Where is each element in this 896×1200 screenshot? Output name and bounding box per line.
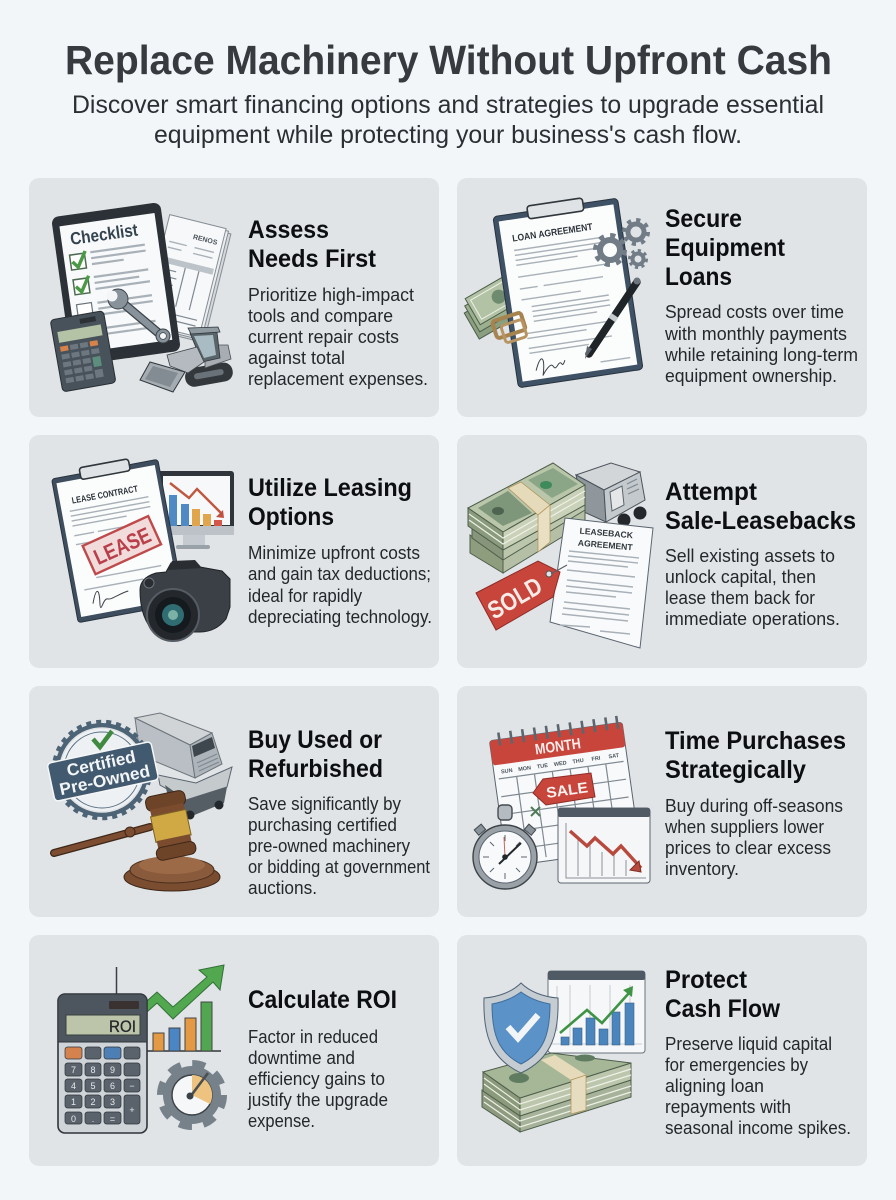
body text: Minimize upfront costs — [248, 543, 420, 563]
panel: buy used or refurbished — [29, 686, 439, 917]
heading: Options — [248, 503, 334, 531]
icon: calendar, stopwatch, falling chart window: MONTH — [534, 735, 582, 758]
heading: Strategically — [665, 756, 806, 784]
icon: lease contract, monitor chart, camera: LEASE — [90, 522, 155, 570]
icon: calendar, stopwatch, falling chart window: MON — [518, 765, 531, 773]
heading: Loans — [665, 263, 732, 291]
body text: efficiency gains to — [248, 1069, 385, 1089]
heading: Attempt — [665, 478, 758, 506]
body text: seasonal income spikes. — [665, 1118, 851, 1138]
body text — [664, 796, 843, 879]
body text: current repair costs — [248, 327, 399, 347]
icon: ROI calculator, growth chart, gauge gear: 5 — [90, 1081, 96, 1091]
icon: cash stacks, machine, leaseback agreement, sold tag — [468, 463, 653, 648]
body text: unlock capital, then — [665, 567, 816, 587]
heading: Equipment — [665, 234, 786, 262]
body text: Prioritize high-impact — [248, 285, 414, 305]
heading: Buy Used or — [248, 726, 382, 754]
body text: prices to clear excess — [665, 838, 831, 858]
body text — [665, 1034, 851, 1138]
icon: checklist tablet, invoice, calculator, bulldozer: RENOS — [192, 234, 218, 247]
heading: Cash Flow — [665, 995, 781, 1023]
body text: and gain tax deductions; — [248, 564, 431, 584]
heading — [665, 966, 781, 1023]
icon: ROI calculator, growth chart, gauge gear: 9 — [110, 1065, 115, 1075]
heading: Time Purchases — [665, 727, 846, 755]
heading: Needs First — [248, 245, 377, 273]
body text — [248, 285, 428, 389]
body text: Preserve liquid capital — [665, 1034, 832, 1054]
icon: lease contract, monitor chart, camera: LEASE CONTRACT — [71, 484, 139, 506]
panel: utilize leasing options — [29, 435, 439, 668]
icon: ROI calculator, growth chart, gauge gear: ROI — [109, 1017, 136, 1036]
heading — [248, 726, 383, 783]
panel: protect cash flow — [457, 935, 867, 1166]
heading: Refurbished — [248, 755, 383, 783]
heading — [248, 216, 377, 273]
body text: while retaining long-term — [664, 345, 858, 365]
body text: when suppliers lower — [664, 817, 824, 837]
heading: Assess — [248, 216, 329, 244]
icon: checklist tablet, invoice, calculator, bulldozer: Checklist — [69, 220, 139, 249]
icon: calendar, stopwatch, falling chart window: WED — [554, 760, 567, 768]
body text: Factor in reduced — [248, 1027, 378, 1047]
heading: Utilize Leasing — [248, 474, 412, 502]
icon: lease contract, monitor chart, camera — [51, 453, 234, 641]
icon: shield, chart window, cash stack — [482, 971, 645, 1132]
icon: ROI calculator, growth chart, gauge gear: 4 — [71, 1081, 76, 1091]
body text — [248, 543, 432, 627]
icon: calendar, stopwatch, falling chart window: FRI — [591, 756, 601, 763]
body text: depreciating technology. — [248, 607, 432, 627]
heading: Sale-Leasebacks — [665, 507, 856, 535]
panel: assess needs first — [29, 178, 439, 417]
icon: calendar, stopwatch, falling chart window: SAT — [608, 753, 620, 760]
icon: certified badge, machine and gavel: Pre-Owned — [58, 761, 152, 799]
body text — [665, 546, 840, 629]
subtitle: equipment while protecting your business's cash flow. — [154, 121, 742, 149]
icon: ROI calculator, growth chart, gauge gear: − — [129, 1081, 135, 1091]
icon: ROI calculator, growth chart, gauge gear: 7 — [71, 1065, 76, 1075]
icon: ROI calculator, growth chart, gauge gear: 1 — [71, 1097, 76, 1107]
body text: Spread costs over time — [665, 302, 844, 322]
body text: with monthly payments — [664, 324, 847, 344]
body text: against total — [248, 348, 345, 368]
body text: for emergencies by — [665, 1055, 808, 1075]
body text: tools and compare — [248, 306, 393, 326]
icon: calendar, stopwatch, falling chart window: TUE — [537, 763, 549, 770]
body text: ideal for rapidly — [248, 586, 362, 606]
body text: justify the upgrade — [247, 1090, 388, 1110]
heading — [665, 205, 786, 291]
body text: pre-owned machinery — [248, 836, 410, 856]
icon: certified badge, machine and gavel — [47, 713, 232, 891]
icon: ROI calculator, growth chart, gauge gear: + — [129, 1105, 135, 1115]
icon: ROI calculator, growth chart, gauge gear: 0 — [71, 1114, 76, 1124]
body text: Save significantly by — [248, 794, 401, 814]
icon: calendar, stopwatch, falling chart window: SUN — [501, 768, 513, 775]
body text: Sell existing assets to — [665, 546, 835, 566]
body text: purchasing certified — [248, 815, 397, 835]
body text: auctions. — [248, 878, 317, 898]
heading — [665, 727, 846, 784]
icon: ROI calculator, growth chart, gauge gear — [58, 965, 224, 1133]
panel: calculate ROI — [29, 935, 439, 1166]
icon: cash stacks, machine, leaseback agreement, sold tag: SOLD — [483, 572, 547, 625]
icon: checklist tablet, invoice, calculator, bulldozer — [50, 202, 234, 392]
panel: attempt sale-leasebacks — [457, 435, 867, 668]
heading — [248, 474, 412, 531]
body text — [664, 302, 858, 386]
body text — [248, 794, 430, 898]
icon: ROI calculator, growth chart, gauge gear: . — [92, 1114, 94, 1124]
title: Replace Machinery Without Upfront Cash — [65, 37, 832, 83]
icon: ROI calculator, growth chart, gauge gear: = — [110, 1114, 115, 1124]
icon: loan agreement clipboard with cash, gears and pen — [458, 193, 648, 388]
icon: calendar, stopwatch, falling chart window: THU — [572, 758, 584, 765]
panel: time purchases strategically — [457, 686, 867, 917]
icon: ROI calculator, growth chart, gauge gear: 2 — [90, 1097, 96, 1107]
heading: Protect — [665, 966, 748, 994]
heading: Secure — [665, 205, 742, 233]
icon: ROI calculator, growth chart, gauge gear: 3 — [110, 1097, 115, 1107]
body text: Buy during off-seasons — [665, 796, 843, 816]
body text: replacement expenses. — [248, 369, 428, 389]
body text: downtime and — [248, 1048, 355, 1068]
icon: cash stacks, machine, leaseback agreement, sold tag: AGREEMENT — [577, 538, 634, 552]
body text: equipment ownership. — [665, 366, 837, 386]
body text: expense. — [248, 1111, 315, 1131]
icon: loan agreement clipboard with cash, gears and pen: LOAN AGREEMENT — [512, 222, 594, 245]
panel: secure equipment loans — [457, 178, 867, 417]
body text: repayments with — [665, 1097, 791, 1117]
icon: ROI calculator, growth chart, gauge gear: 8 — [90, 1065, 96, 1075]
icon: ROI calculator, growth chart, gauge gear: 6 — [110, 1081, 115, 1091]
heading: Calculate ROI — [248, 986, 397, 1014]
subtitle: Discover smart financing options and strategies to upgrade essential — [72, 91, 824, 119]
icon: cash stacks, machine, leaseback agreement, sold tag: LEASEBACK — [579, 526, 634, 540]
body text: immediate operations. — [665, 609, 840, 629]
body text: lease them back for — [665, 588, 815, 608]
heading — [665, 478, 856, 535]
subtitle — [72, 91, 824, 149]
icon: calendar, stopwatch, falling chart window — [473, 715, 650, 889]
body text: inventory. — [665, 859, 739, 879]
body text: or bidding at government — [248, 857, 430, 877]
icon: calendar, stopwatch, falling chart window: SALE — [545, 779, 589, 802]
body text — [247, 1027, 388, 1131]
body text: aligning loan — [665, 1076, 764, 1096]
icon: certified badge, machine and gavel: Certified — [65, 747, 137, 780]
